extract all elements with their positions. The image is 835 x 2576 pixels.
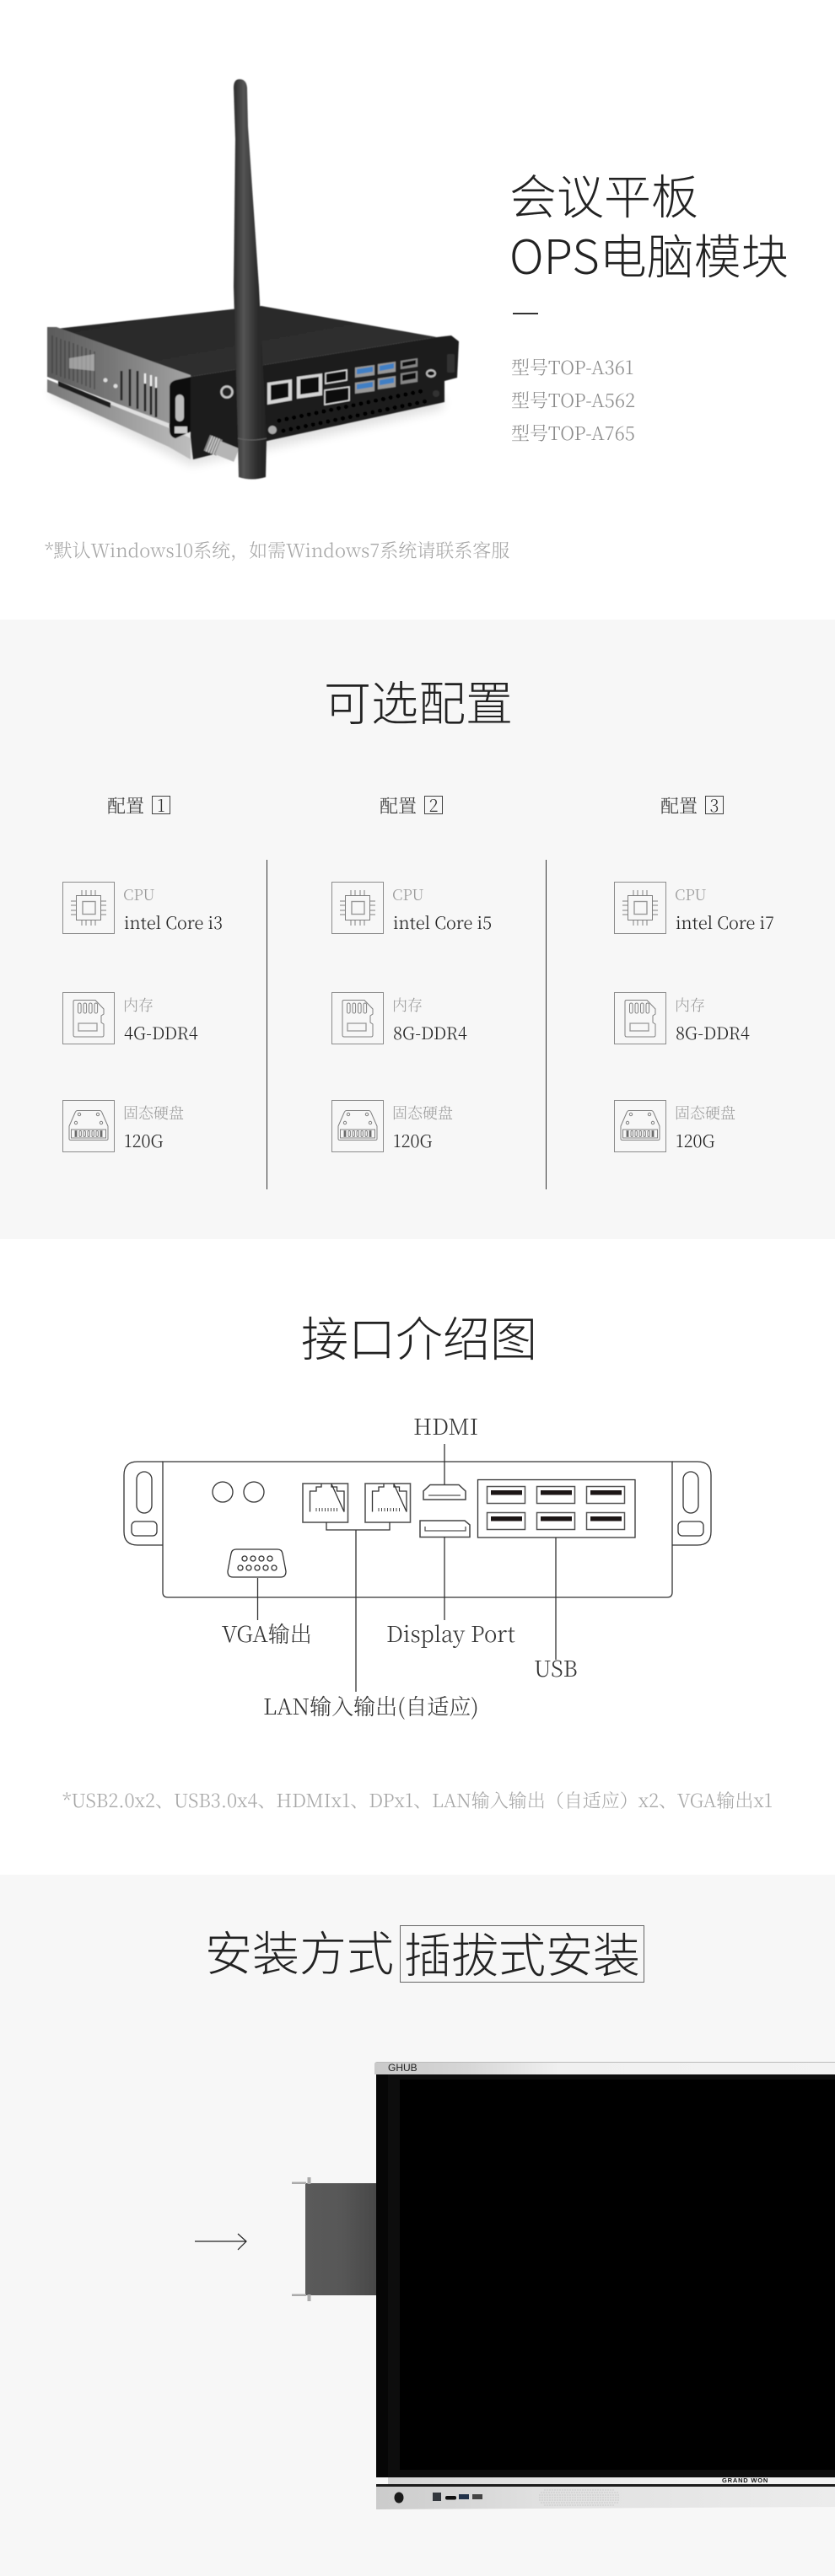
monitor screen (400, 2080, 835, 2470)
icon: cpu, config 1 (62, 882, 115, 934)
monitor top strip (374, 2062, 835, 2074)
icon: memory, config 3 (614, 992, 666, 1044)
lower light strip (388, 2477, 835, 2485)
icon: cpu, config 2 (331, 882, 384, 934)
model list (511, 354, 635, 446)
monitor bezel (376, 2074, 835, 2477)
accent dash (513, 313, 538, 314)
memory value, config 2: 8G-DDR4 (393, 1020, 467, 1044)
heading: optional configurations: 可选配置 (324, 667, 513, 735)
panel: product intro (0, 0, 835, 620)
icon: memory, config 2 (331, 992, 384, 1044)
ssd label, config 1: 固态硬盘 (123, 1102, 184, 1124)
divider between config 2 and 3 (546, 860, 547, 1189)
icon: ssd, config 3 (614, 1100, 666, 1152)
ssd value, config 3: 120G (676, 1128, 714, 1152)
brand mark GHUB: GHUB (388, 2062, 418, 2074)
cpu value, config 3: intel Core i7 (676, 910, 774, 934)
product title: 会议平板 (509, 160, 698, 228)
ssd label, config 3: 固态硬盘 (675, 1102, 735, 1124)
heading: installation method: 安装方式 (205, 1917, 394, 1985)
icon: ssd, config 1 (62, 1100, 115, 1152)
memory label, config 2: 内存 (392, 994, 423, 1016)
memory label, config 3: 内存 (675, 994, 705, 1016)
icon: ssd, config 2 (331, 1100, 384, 1152)
config 2 heading: 配置 (380, 792, 417, 818)
config 1 heading: 配置 (107, 792, 144, 818)
brand mark GRAND WON: GRAND WON (722, 2477, 768, 2484)
product subtitle: OPS电脑模块 (509, 220, 789, 288)
memory value, config 3: 8G-DDR4 (676, 1020, 750, 1044)
cpu label, config 1: CPU (123, 883, 155, 905)
dark divider (376, 2484, 835, 2487)
port label: HDMI: HDMI (413, 1410, 478, 1441)
cpu label, config 2: CPU (392, 883, 424, 905)
product photo: OPS computer module with antenna (46, 78, 460, 480)
model list: 型号TOP-A562 (511, 387, 635, 413)
model list: 型号TOP-A361 (511, 354, 633, 380)
memory value, config 1: 4G-DDR4 (124, 1020, 198, 1044)
port label: USB: USB (534, 1652, 578, 1683)
panel: installation (0, 1875, 835, 2576)
icon: cpu, config 3 (614, 882, 666, 934)
config 2 heading (380, 792, 443, 818)
ports note: *USB2.0x2、USB3.0x4、HDMIx1、DPx1、LAN输入输出（自适应）x2、VGA输出x1 (62, 1787, 773, 1813)
config 1 heading (107, 792, 170, 818)
interactive display monitor (374, 2062, 835, 2509)
system note: *默认Windows10系统，如需Windows7系统请联系客服 (45, 537, 509, 563)
cpu value, config 1: intel Core i3 (124, 910, 223, 934)
config 2 heading: 2 (428, 792, 439, 817)
icon: memory, config 1 (62, 992, 115, 1044)
cpu label, config 3: CPU (675, 883, 707, 905)
config 3 heading: 配置 (660, 792, 698, 818)
config 1 heading: 1 (157, 792, 165, 817)
config 3 heading (660, 792, 724, 818)
model list: 型号TOP-A765 (511, 420, 635, 446)
memory label, config 1: 内存 (123, 994, 154, 1016)
panel: optional configurations (0, 620, 835, 1239)
ssd value, config 2: 120G (393, 1128, 432, 1152)
ssd value, config 1: 120G (124, 1128, 163, 1152)
heading: interface diagram: 接口介绍图 (301, 1302, 537, 1371)
port label: Display Port: Display Port (386, 1618, 515, 1649)
heading highlight: plug-in installation: 插拔式安装 (404, 1919, 640, 1987)
cpu value, config 2: intel Core i5 (393, 910, 492, 934)
port label: VGA: VGA输出 (222, 1618, 312, 1649)
config 3 heading: 3 (710, 792, 719, 817)
port label: LAN: LAN输入输出(自适应) (263, 1690, 479, 1721)
ssd label, config 2: 固态硬盘 (392, 1102, 453, 1124)
silver control bar (376, 2487, 835, 2509)
